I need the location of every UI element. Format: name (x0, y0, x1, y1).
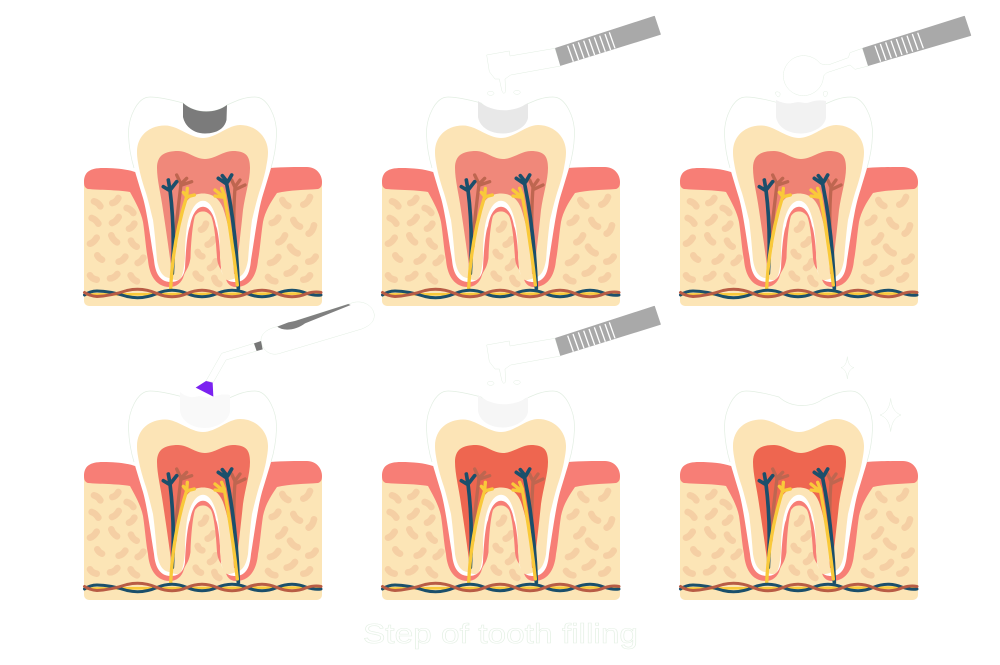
icon: dental drill (487, 16, 660, 95)
panel: step 2 drilling (382, 16, 660, 306)
icon: filling tool (775, 16, 971, 97)
icon: polishing drill (487, 306, 660, 385)
cavity (183, 103, 227, 134)
panel: step 5 polishing (382, 306, 660, 600)
panel: step 4 light curing (84, 302, 374, 600)
panel: step 6 finished tooth (680, 357, 918, 600)
panel: step 3 filling (680, 16, 971, 306)
icon: curing light (196, 302, 374, 397)
panel: step 1 decayed cavity (84, 97, 322, 306)
icon: sparkles (841, 357, 901, 432)
title: Step of tooth filling (363, 618, 638, 649)
